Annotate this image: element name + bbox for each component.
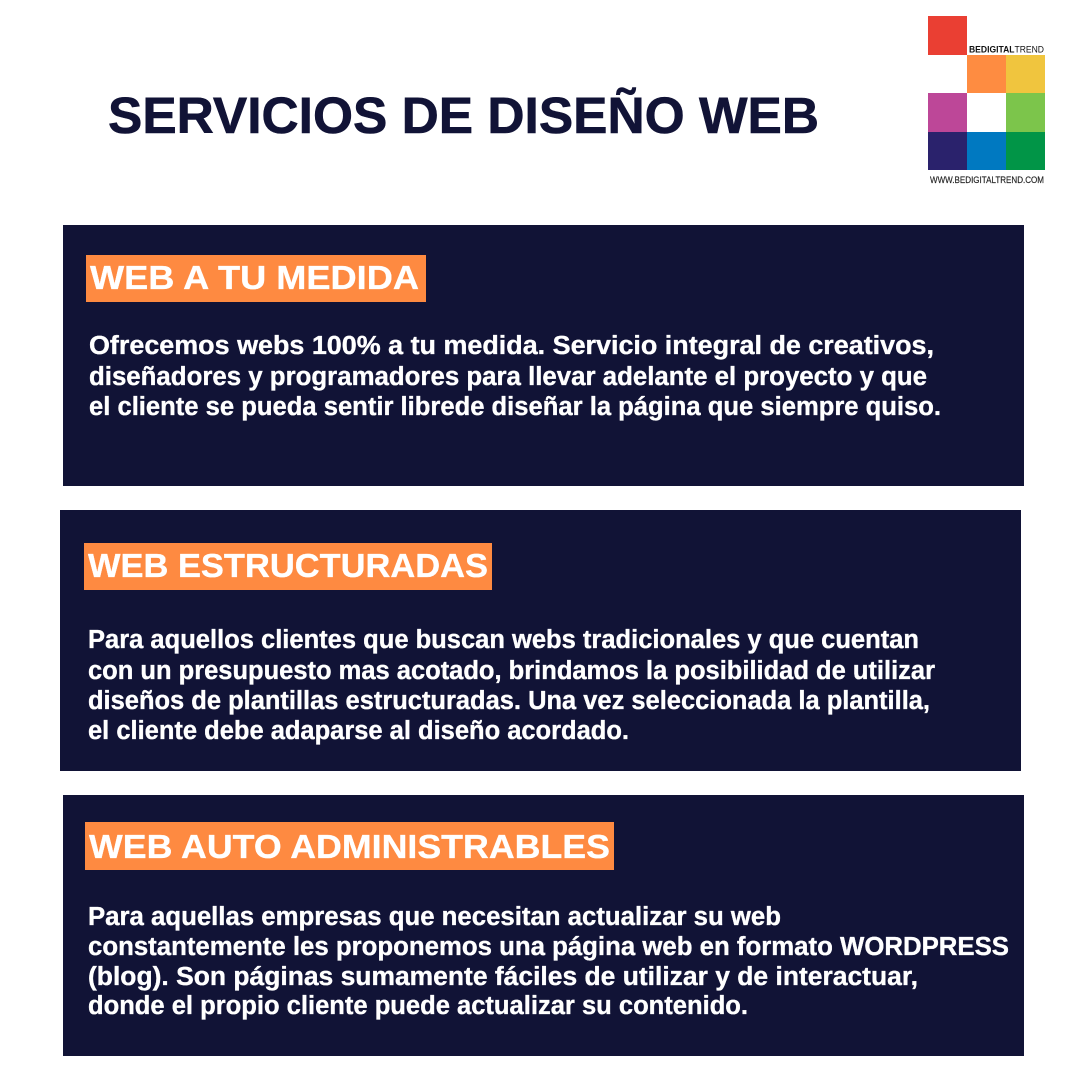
logo: Bedigitaltrend bbox=[928, 16, 1045, 185]
text block: web estructuradas: con un presupuesto mas acotado, brindamos la posibilidad de utilizar bbox=[88, 657, 935, 685]
text block: web estructuradas: diseños de plantillas estructuradas. Una vez seleccionada la plantilla, bbox=[88, 687, 930, 715]
text block: web estructuradas: el cliente debe adaparse al diseño acordado. bbox=[88, 717, 629, 745]
text block: web auto administrables: donde el propio cliente puede actualizar su contenido. bbox=[88, 992, 748, 1020]
text block: web a tu medida bbox=[89, 332, 941, 421]
text block: web auto administrables: (blog). Son páginas sumamente fáciles de utilizar y de interactuar, bbox=[88, 963, 918, 991]
heading: web estructuradas: WEB ESTRUCTURADAS bbox=[88, 548, 488, 585]
text block: web a tu medida: el cliente se pueda sentir librede diseñar la página que siempre quiso. bbox=[89, 393, 941, 421]
text block: web estructuradas bbox=[88, 626, 935, 745]
heading: web auto administrables: WEB AUTO ADMINISTRABLES bbox=[89, 829, 610, 866]
logo: Bedigitaltrend: WWW.BEDIGITALTREND.COM bbox=[930, 175, 1044, 185]
text block: web estructuradas: Para aquellos clientes que buscan webs tradicionales y que cuentan bbox=[88, 626, 919, 654]
text block: web a tu medida: Ofrecemos webs 100% a tu medida. Servicio integral de creativos, bbox=[89, 332, 934, 360]
text block: web a tu medida: diseñadores y programadores para llevar adelante el proyecto y que bbox=[89, 363, 927, 391]
logo: Bedigitaltrend: BEDIGITALTREND bbox=[969, 44, 1044, 54]
panel: web a tu medida bbox=[63, 225, 1024, 486]
title: SERVICIOS DE DISEÑO WEB bbox=[108, 86, 819, 144]
text block: web auto administrables bbox=[88, 903, 1009, 1020]
text block: web auto administrables: constantemente les proponemos una página web en formato WORDPRESS bbox=[88, 933, 1009, 961]
panel: web estructuradas bbox=[60, 510, 1021, 771]
text block: web auto administrables: Para aquellas empresas que necesitan actualizar su web bbox=[88, 903, 781, 931]
heading: web a tu medida: WEB A TU MEDIDA bbox=[90, 260, 419, 297]
panel: web auto administrables bbox=[63, 795, 1024, 1056]
